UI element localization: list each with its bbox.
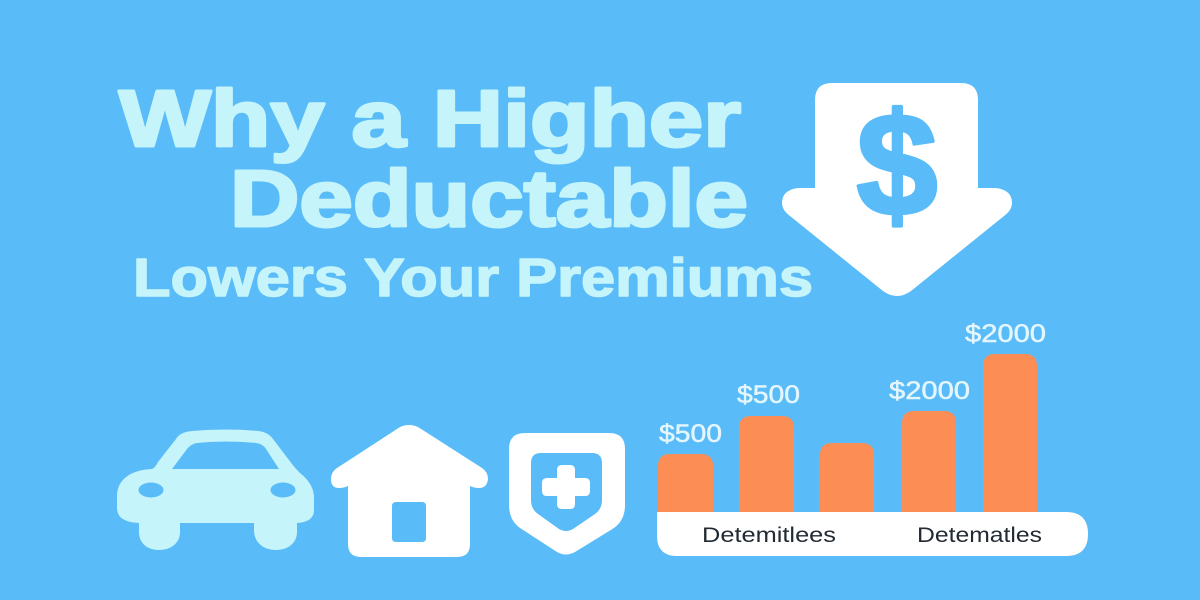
icon: down arrow with dollar sign: $ xyxy=(856,83,938,246)
bar value labels: $2000 xyxy=(965,320,1046,348)
car headlight left xyxy=(138,482,164,498)
icon: car xyxy=(117,430,314,550)
bar value labels xyxy=(659,320,1046,448)
bar value labels: $500 xyxy=(737,381,800,409)
shield cross xyxy=(542,465,590,509)
icon: house xyxy=(331,425,488,557)
axis labels: Detematles xyxy=(917,524,1042,547)
title xyxy=(119,74,813,308)
title: Lowers Your Premiums xyxy=(133,248,813,308)
title: Deductable xyxy=(230,154,748,243)
axis labels: Detemitlees xyxy=(702,524,836,547)
car headlight right xyxy=(270,482,296,498)
bars xyxy=(658,354,1037,512)
icon: shield with medical cross xyxy=(509,433,625,554)
icon: down arrow with dollar sign xyxy=(782,83,1012,296)
title: Why a Higher xyxy=(119,74,741,163)
bar value labels: $500 xyxy=(659,420,722,448)
axis label bar xyxy=(657,512,1088,556)
bar value labels: $2000 xyxy=(889,377,970,405)
bar chart xyxy=(657,320,1088,556)
axis labels xyxy=(702,524,1042,547)
